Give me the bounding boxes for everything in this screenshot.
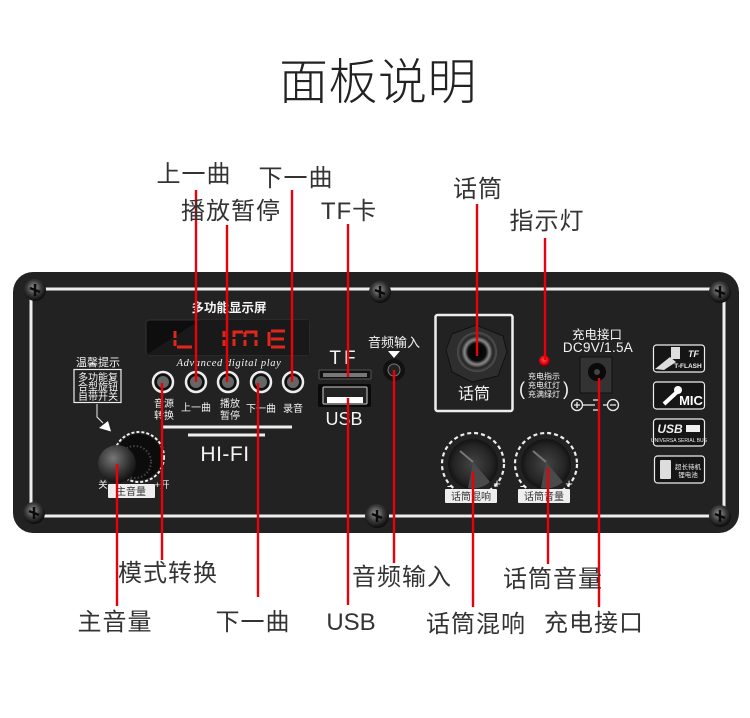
indicator light: ( (519, 379, 525, 399)
badge: T-FLASH: T-FLASH (674, 363, 702, 370)
knob: mic reverb: - (447, 478, 451, 493)
badge: T-FLASH: TF (688, 349, 699, 359)
indicator light: ) (563, 379, 569, 399)
badge: MIC: MIC (679, 393, 704, 408)
button labels: 下一曲 (246, 403, 276, 415)
labels: top: 播放暂停 (181, 198, 281, 225)
TF and USB ports: USB (325, 409, 363, 429)
HI-FI logo (162, 427, 292, 466)
labels: bottom: 话筒混响 (426, 611, 526, 638)
knob: master volume: +开 (154, 480, 170, 491)
labels: bottom: 模式转换 (118, 560, 218, 587)
labels: top: 话筒 (453, 176, 503, 203)
LED display (146, 320, 309, 355)
button labels (154, 397, 303, 422)
display caption: Advanced digital play (176, 358, 281, 369)
TF and USB ports (318, 348, 371, 429)
labels: top (156, 161, 584, 235)
button labels: 暂停 (220, 409, 240, 422)
labels: bottom: 音频输入 (352, 564, 452, 591)
labels: top: 上一曲 (156, 161, 232, 188)
knob: mic reverb (442, 433, 504, 503)
labels: top: 指示灯 (510, 208, 584, 235)
microphone socket (436, 315, 512, 411)
button labels: 录音 (283, 402, 303, 415)
audio input: 音频输入 (368, 335, 420, 350)
knob: mic reverb: 话筒混响 (451, 490, 491, 503)
audio input (368, 335, 420, 381)
knob: mic volume: - (520, 478, 524, 493)
mode buttons (153, 372, 303, 392)
microphone socket: 话筒 (458, 385, 490, 403)
screws (23, 279, 731, 528)
reminder box: 多功能复 (78, 371, 118, 384)
knob: master volume: 关 (98, 479, 108, 491)
button labels: 音源 (154, 397, 174, 410)
badge: USB: UNIVERSA SERIAL BUS (651, 438, 708, 444)
reminder box (74, 355, 121, 432)
charging port: 充电接口 (572, 327, 622, 342)
title: 面板说明 (279, 56, 477, 110)
indicator light (519, 356, 569, 399)
badge: battery (654, 456, 704, 483)
panel border (31, 289, 724, 516)
badge: USB (651, 419, 708, 446)
button labels: 转换 (154, 409, 174, 422)
badge: MIC (654, 382, 704, 409)
button labels: 播放 (220, 397, 240, 410)
knob: mic volume: + (565, 476, 573, 491)
HI-FI logo: HI-FI (200, 443, 250, 466)
charging port (563, 327, 633, 410)
labels: top: TF卡 (321, 198, 377, 225)
labels: top: 下一曲 (258, 165, 334, 192)
reminder box: 合型旋钮 (78, 380, 118, 394)
panel: control panel (13, 272, 739, 533)
badge: battery: 锂电池 (678, 470, 698, 479)
knob: master volume (98, 432, 170, 498)
indicator light: 充电红灯 (528, 380, 560, 390)
labels: bottom: 话筒音量 (503, 566, 603, 593)
callout lines (117, 190, 599, 607)
button labels: 上一曲 (181, 402, 211, 414)
labels: bottom: USB (326, 609, 376, 636)
reminder box: 自带开关 (78, 390, 118, 403)
indicator light: 充满绿灯 (528, 389, 560, 399)
knob: mic reverb: + (493, 476, 501, 491)
knob: master volume: 主音量 (116, 485, 146, 498)
badge: T-FLASH (654, 345, 704, 372)
reminder box: 温馨提示 (76, 355, 120, 369)
labels: bottom: 主音量 (78, 609, 152, 636)
button centers (157, 376, 299, 388)
labels: bottom (78, 560, 644, 638)
knob: mic volume (515, 433, 577, 503)
labels: bottom: 下一曲 (216, 609, 290, 636)
badge: battery: 超长待机 (675, 462, 702, 471)
display heading: 多功能显示屏 (191, 300, 267, 315)
indicator light: 充电指示 (528, 371, 560, 381)
labels: bottom: 充电接口 (544, 610, 644, 637)
badge: USB: USB (657, 422, 683, 436)
charging port: DC9V/1.5A (563, 340, 633, 355)
knob: mic volume: 话筒音量 (524, 490, 564, 503)
TF and USB ports: TF (329, 348, 359, 369)
